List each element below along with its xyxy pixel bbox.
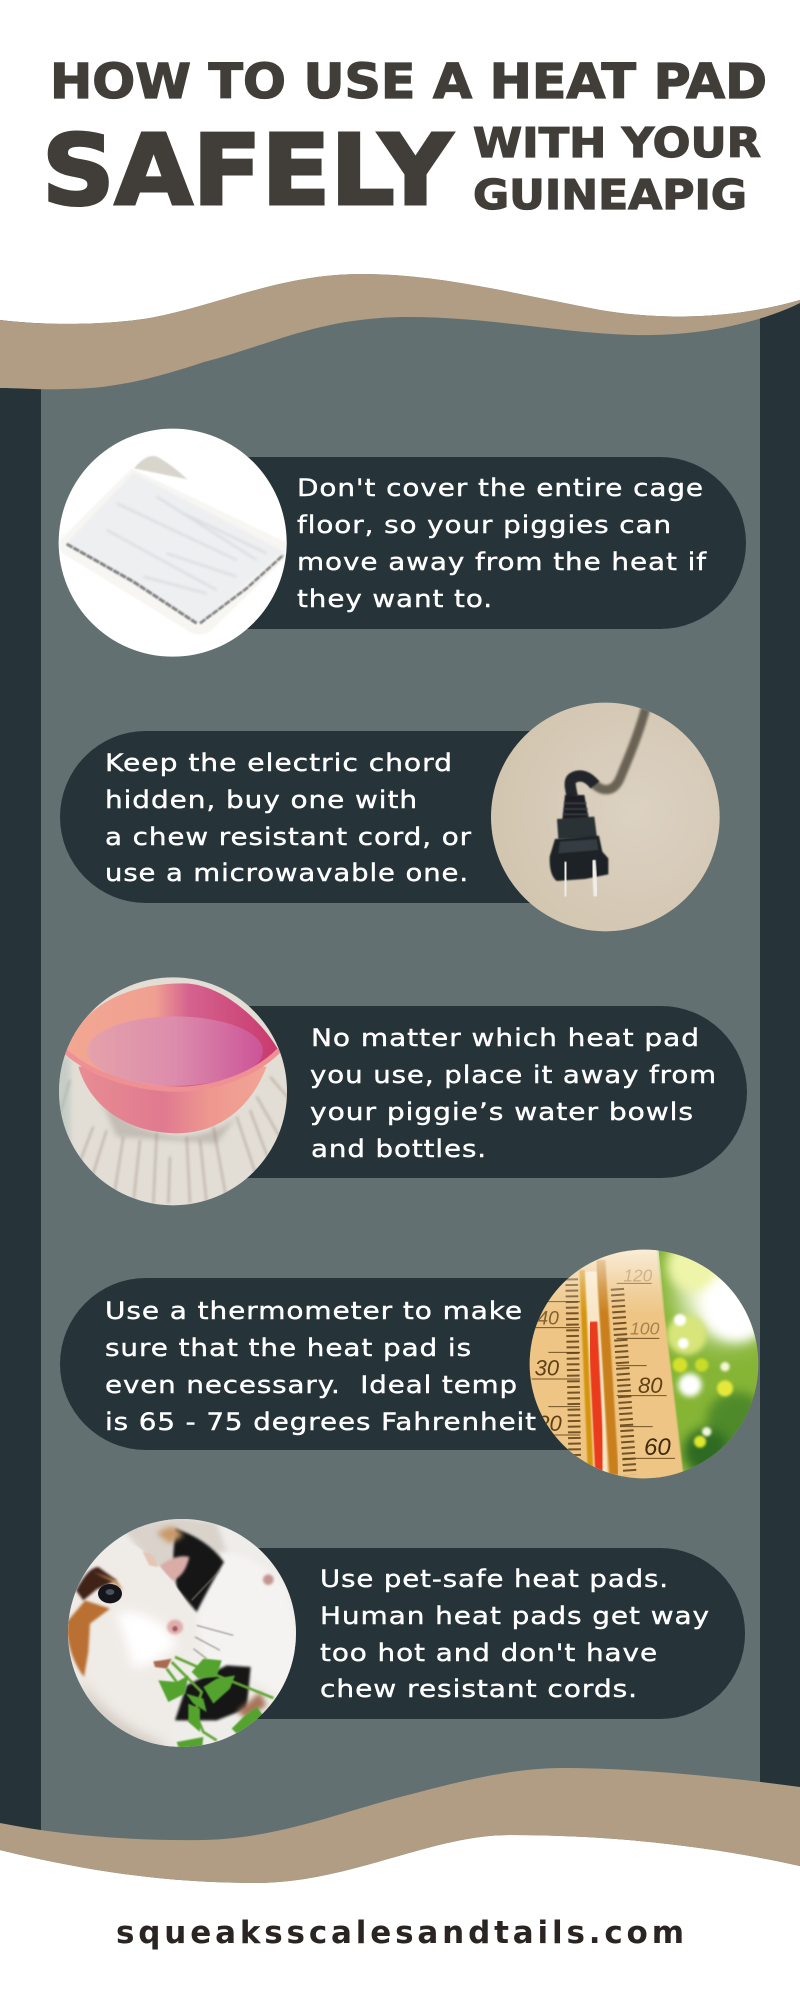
scale numbers: 20 xyxy=(536,1411,563,1436)
tip text: is 65 - 75 degrees Fahrenheit xyxy=(105,1408,537,1436)
parsley sprig xyxy=(158,1657,273,1752)
title line: how to use: HOW TO USE A HEAT PAD xyxy=(50,54,767,110)
photo: guinea pig eating parsley xyxy=(68,1519,296,1747)
tip text: sure that the heat pad is xyxy=(105,1334,472,1362)
bottom tan wave xyxy=(0,1768,800,1883)
scale numbers: 80 xyxy=(638,1373,663,1398)
tip text: Don't cover the entire cage xyxy=(297,474,704,502)
tip text: they want to. xyxy=(297,585,493,613)
scale numbers: 100 xyxy=(630,1318,660,1338)
footer website: squeaksscalesandtails.com xyxy=(116,1915,684,1951)
white area above top wave xyxy=(0,0,800,324)
centre panel xyxy=(41,270,760,1890)
tip text xyxy=(105,1297,537,1436)
panel: tip 4 thermometer xyxy=(60,1250,758,1478)
tip text: Human heat pads get way xyxy=(320,1602,710,1630)
tip text: a chew resistant cord, or xyxy=(105,823,472,851)
tip text: and bottles. xyxy=(311,1135,487,1163)
tip text: chew resistant cords. xyxy=(320,1675,638,1703)
tip text: move away from the heat if xyxy=(297,548,707,576)
tip text xyxy=(320,1565,710,1703)
scale numbers: 40 xyxy=(537,1308,559,1329)
title line: with your: WITH YOUR xyxy=(473,119,761,167)
tip text xyxy=(297,474,707,613)
tip text: hidden, buy one with xyxy=(105,786,418,814)
pill xyxy=(100,457,746,629)
photo: thermometer in the sun xyxy=(530,1250,758,1478)
white area below bottom wave xyxy=(0,1835,800,2000)
left side bar xyxy=(0,270,41,1890)
pill xyxy=(110,1548,745,1719)
tip text: you use, place it away from xyxy=(310,1061,717,1089)
pill xyxy=(60,731,650,903)
tip text xyxy=(105,749,472,887)
photo: electric plug xyxy=(491,702,720,932)
tip text: No matter which heat pad xyxy=(311,1024,700,1052)
tip text: too hot and don't have xyxy=(320,1639,658,1667)
tip text: use a microwavable one. xyxy=(105,859,469,887)
panel: tip 1 cover floor xyxy=(58,428,746,657)
pill xyxy=(100,1006,747,1178)
right side bar xyxy=(760,270,800,1890)
scale numbers: 30 xyxy=(535,1356,560,1381)
title word: safely: SAFELY xyxy=(42,114,454,227)
scale numbers xyxy=(535,1266,671,1461)
panel: tip 5 pet-safe pads xyxy=(68,1519,745,1747)
title xyxy=(42,54,767,227)
title line: guineapig: GUINEAPIG xyxy=(473,171,747,219)
tip text: Use a thermometer to make xyxy=(105,1297,523,1325)
tip text: even necessary. Ideal temp xyxy=(105,1371,518,1399)
scale numbers: 120 xyxy=(623,1266,653,1286)
tip text: your piggie’s water bowls xyxy=(310,1098,694,1126)
panel: tip 3 water bowls xyxy=(59,977,747,1206)
panel: tip 2 hide cord xyxy=(60,702,720,932)
photo: pink water bowl xyxy=(59,977,287,1206)
photo: white heat pad xyxy=(58,428,287,657)
pill xyxy=(60,1278,690,1450)
tip text: floor, so your piggies can xyxy=(297,511,672,539)
tip text: Use pet-safe heat pads. xyxy=(320,1565,669,1593)
tip text: Keep the electric chord xyxy=(105,749,453,777)
scale numbers: 60 xyxy=(644,1434,671,1461)
top tan wave xyxy=(0,274,800,389)
tip text xyxy=(310,1024,717,1163)
